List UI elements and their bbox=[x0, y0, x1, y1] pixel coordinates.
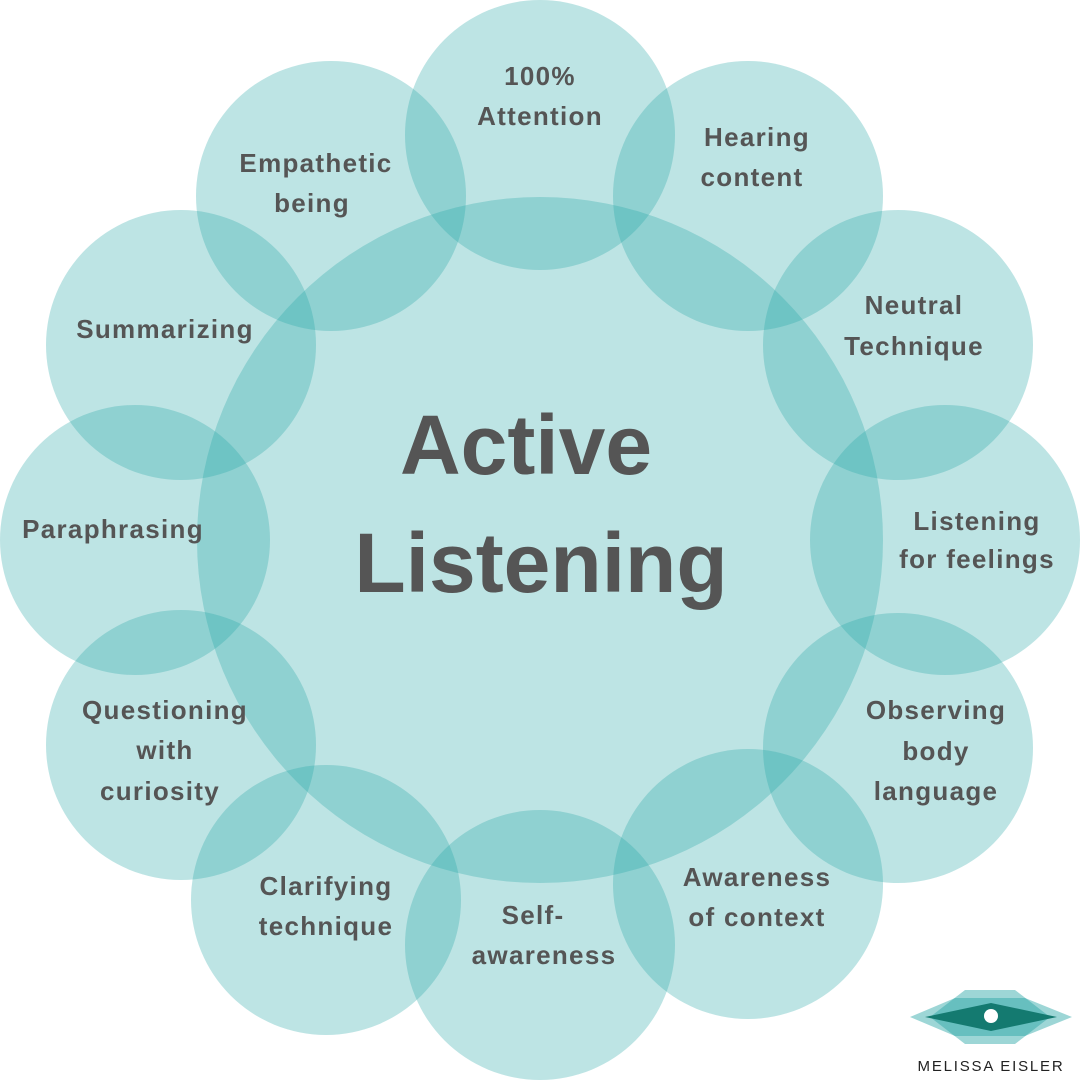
circle: Self-awareness: awareness bbox=[472, 940, 616, 970]
circle: Awareness of context: Awareness bbox=[683, 862, 831, 892]
central circle bbox=[197, 197, 883, 883]
circle: 100% Attention: Attention bbox=[477, 101, 603, 131]
circle: Neutral Technique: Technique bbox=[844, 331, 984, 361]
title: Listening bbox=[354, 516, 728, 610]
circle: 100% Attention: 100% bbox=[504, 61, 576, 91]
circle: Hearing content: Hearing bbox=[704, 122, 810, 152]
circle: Questioning with curiosity: with bbox=[135, 735, 194, 765]
circle: Clarifying technique: Clarifying bbox=[260, 871, 392, 901]
circle: Questioning with curiosity bbox=[46, 610, 316, 880]
circle: Neutral Technique: Neutral bbox=[865, 290, 963, 320]
circle: Observing body language bbox=[763, 613, 1033, 883]
circle: Self-awareness bbox=[405, 810, 675, 1080]
circle: Listening for feelings: for feelings bbox=[899, 544, 1055, 574]
circle: Hearing content: content bbox=[701, 162, 803, 192]
circle: Self-awareness: Self- bbox=[502, 900, 564, 930]
logo: MELISSA EISLER bbox=[918, 1058, 1064, 1075]
circle: Empathetic being bbox=[196, 61, 466, 331]
circle: Awareness of context: of context bbox=[688, 902, 826, 932]
circle: Clarifying technique bbox=[191, 765, 461, 1035]
circle: Questioning with curiosity: Questioning bbox=[82, 695, 248, 725]
circle: Neutral Technique bbox=[763, 210, 1033, 480]
circle: 100% Attention bbox=[405, 0, 675, 270]
circle: Summarizing bbox=[46, 210, 316, 480]
circle: Clarifying technique: technique bbox=[259, 911, 393, 941]
circle: Observing body language: language bbox=[874, 776, 998, 806]
title: Active bbox=[400, 398, 652, 492]
circle: Observing body language: body bbox=[902, 736, 970, 766]
circle: Paraphrasing bbox=[0, 405, 270, 675]
circle: Paraphrasing: Paraphrasing bbox=[22, 514, 204, 544]
circle: Awareness of context bbox=[613, 749, 883, 1019]
circle: Listening for feelings: Listening bbox=[913, 506, 1041, 536]
circle: Empathetic being: being bbox=[274, 188, 350, 218]
circle: Hearing content bbox=[613, 61, 883, 331]
circle: Summarizing: Summarizing bbox=[76, 314, 254, 344]
logo bbox=[910, 990, 1072, 1075]
circle: Observing body language: Observing bbox=[866, 695, 1006, 725]
title bbox=[354, 398, 728, 610]
circle: Questioning with curiosity: curiosity bbox=[100, 776, 220, 806]
circle: Listening for feelings bbox=[810, 405, 1080, 675]
circle: Empathetic being: Empathetic bbox=[239, 148, 393, 178]
